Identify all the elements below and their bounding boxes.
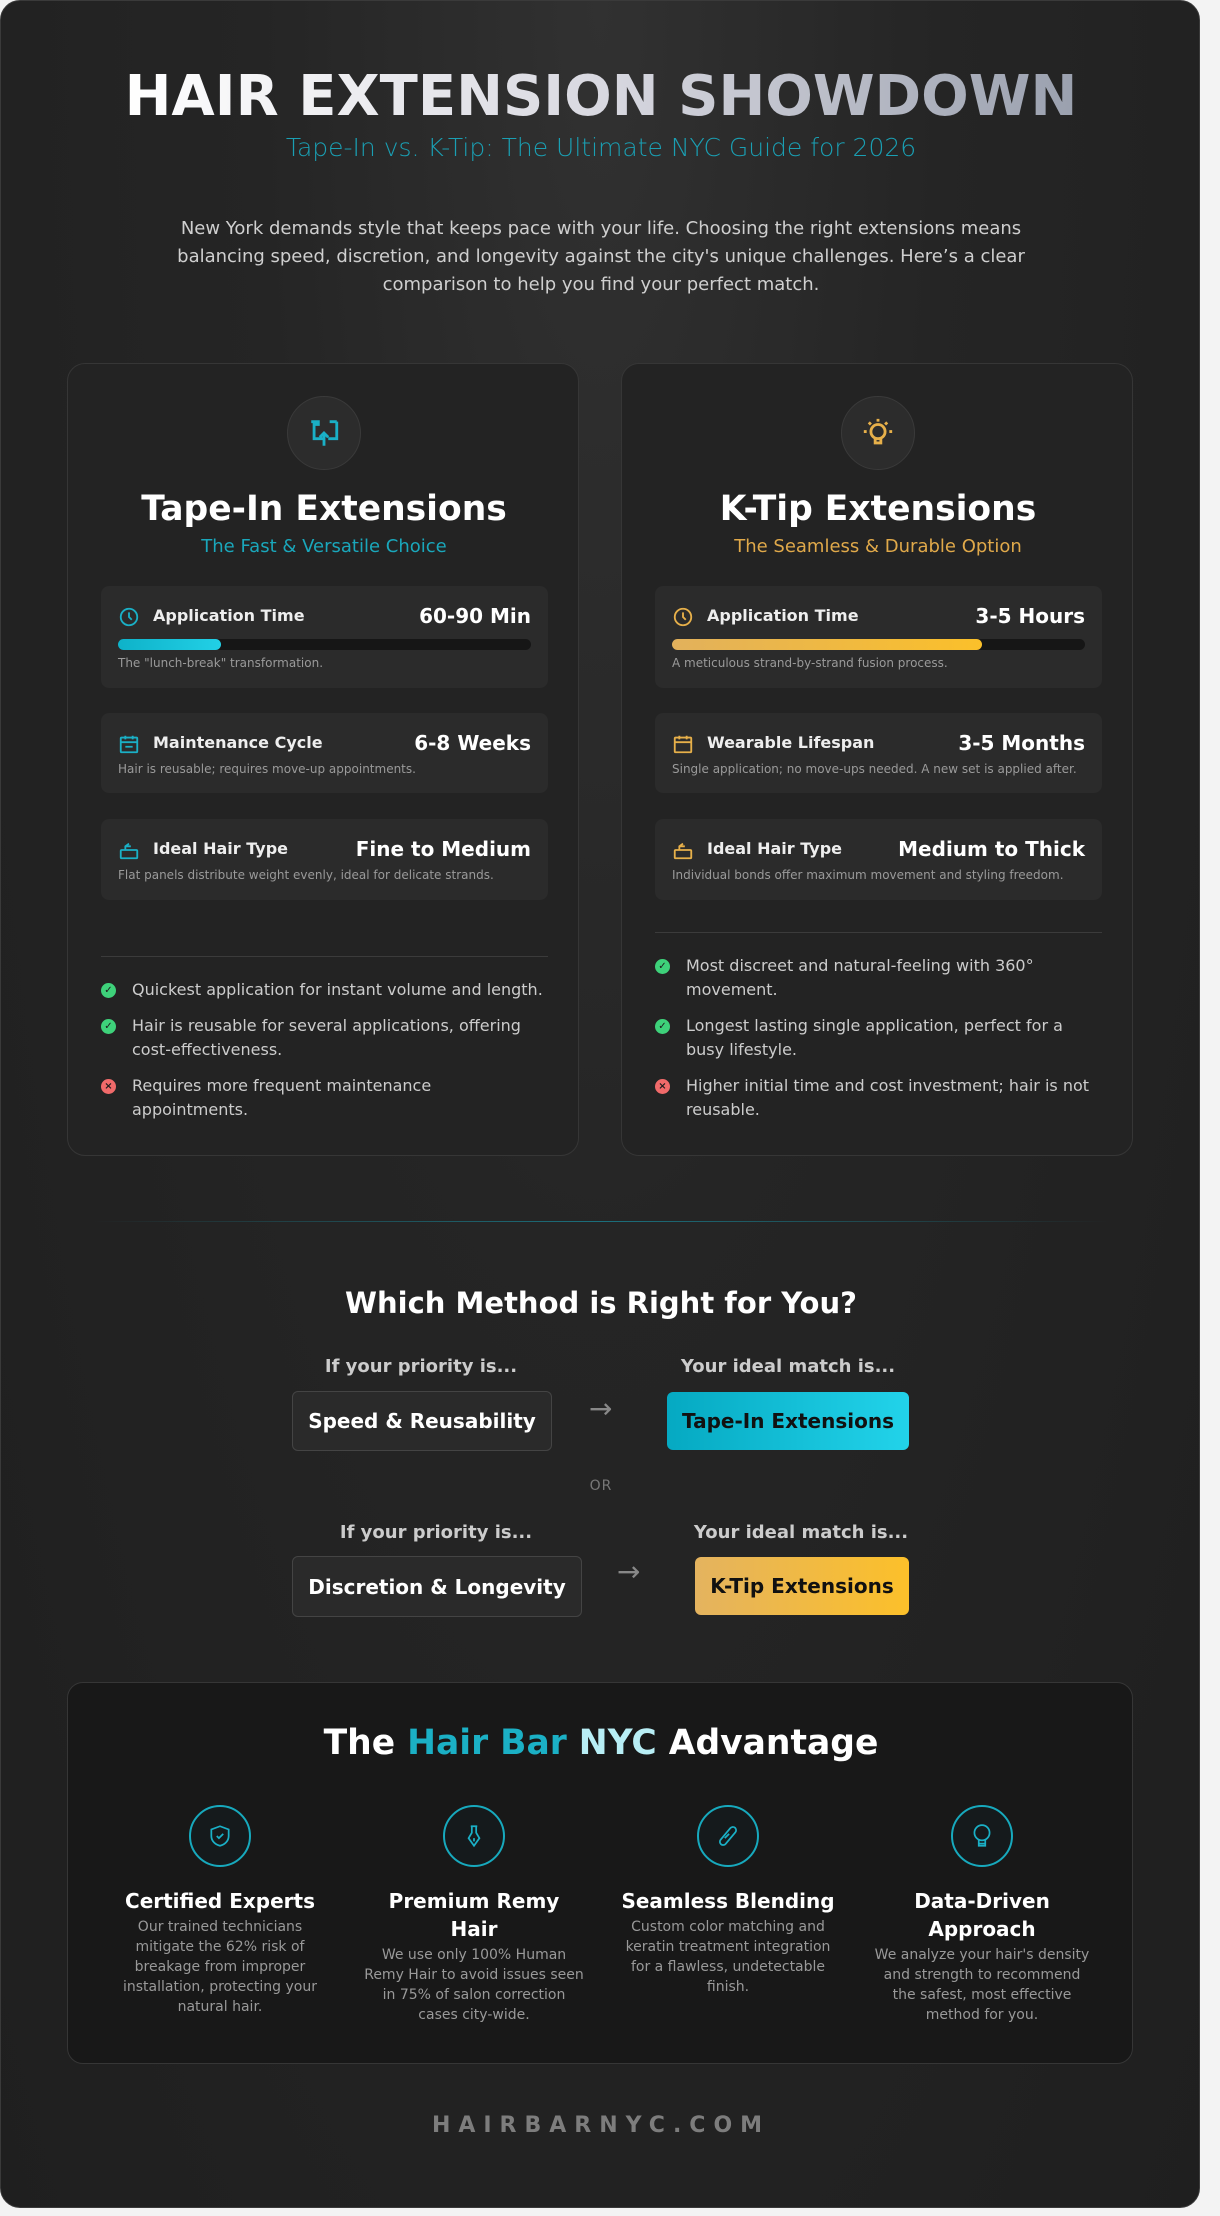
pros and cons: ✓ (658, 1021, 667, 1032)
stat: hair type: Fine to Medium (356, 837, 531, 861)
pros and cons: Requires more frequent maintenance appointments. (132, 1076, 431, 1119)
pros and cons: ✓ (658, 961, 667, 972)
panel: tape-in (67, 363, 579, 1156)
decision row 2: If your priority is... (340, 1522, 532, 1543)
subtitle: Tape-In vs. K-Tip: The Ultimate NYC Guide for 2026 (286, 133, 916, 162)
feature: premium remy hair: Premium Remy Hair (389, 1889, 559, 1941)
pros and cons: × (658, 1081, 667, 1092)
pros and cons (655, 956, 1089, 1119)
section heading: which method: Which Method is Right for You? (345, 1286, 857, 1320)
feature: premium remy hair (364, 1805, 584, 2023)
pros and cons: Hair is reusable for several applications, offering cost-effectiveness. (132, 1016, 521, 1059)
feature: seamless blending: Custom color matching and keratin treatment integration for a flawless, undetectable finish. (626, 1919, 830, 1995)
decision row 2: K-Tip Extensions (710, 1574, 894, 1598)
pros and cons: × (104, 1081, 113, 1092)
decision row 1 (292, 1356, 909, 1451)
feature: certified experts: Our trained technicians mitigate the 62% risk of breakage from improper installation, protecting your natural hair. (123, 1919, 317, 2015)
feature: certified experts (123, 1805, 317, 2015)
stat: application time: 3-5 Hours (975, 604, 1085, 628)
decision row 2: Discretion & Longevity (308, 1574, 566, 1598)
decision row 2: Your ideal match is... (694, 1522, 908, 1543)
pros and cons: Quickest application for instant volume and length. (132, 980, 543, 999)
card subtitle: The Fast & Versatile Choice (201, 536, 447, 557)
stat: hair type: Ideal Hair Type (707, 839, 842, 858)
decision row 1: Your ideal match is... (681, 1356, 895, 1377)
feature: seamless blending (621, 1805, 835, 1995)
feature: data-driven: We analyze your hair's density and strength to recommend the safest, most effective method for you. (875, 1947, 1089, 2023)
feature: data-driven (875, 1805, 1089, 2023)
card title: K-Tip Extensions (720, 489, 1036, 529)
arrow: → (617, 1555, 640, 1588)
decision row 1: If your priority is... (325, 1356, 517, 1377)
pros and cons: Longest lasting single application, perfect for a busy lifestyle. (686, 1016, 1063, 1059)
stat: lifespan: Single application; no move-ups needed. A new set is applied after. (672, 762, 1077, 776)
stat: hair type: Medium to Thick (898, 837, 1085, 861)
stat: hair type (655, 819, 1102, 900)
stat: application time: The "lunch-break" transformation. (118, 656, 323, 670)
stat: maintenance: 6-8 Weeks (414, 731, 531, 755)
stat: maintenance: Maintenance Cycle (153, 733, 323, 752)
stat: application time: Application Time (153, 606, 305, 625)
stat: hair type (101, 819, 548, 900)
stat: application time (101, 586, 548, 688)
decision row 1: Tape-In Extensions (682, 1409, 894, 1433)
decision row 1: Speed & Reusability (308, 1409, 536, 1433)
pros and cons (101, 980, 543, 1119)
decision row 2 (292, 1522, 909, 1617)
icon: lightbulb (841, 396, 915, 470)
feature: data-driven: Data-Driven Approach (914, 1889, 1050, 1941)
pros and cons: Higher initial time and cost investment; hair is not reusable. (686, 1076, 1089, 1119)
footer: HAIRBARNYC.COM (432, 2113, 770, 2138)
stat: hair type: Ideal Hair Type (153, 839, 288, 858)
stat: maintenance (101, 713, 548, 793)
stat: lifespan (655, 713, 1102, 793)
stat: lifespan: Wearable Lifespan (707, 733, 874, 752)
title: HAIR EXTENSION SHOWDOWN (125, 64, 1077, 129)
pros and cons: ✓ (104, 1021, 113, 1032)
stat: hair type: Flat panels distribute weight evenly, ideal for delicate strands. (118, 868, 494, 882)
stat: application time: Application Time (707, 606, 859, 625)
stat: lifespan: 3-5 Months (958, 731, 1085, 755)
panel: advantage (67, 1682, 1133, 2064)
stat: application time (655, 586, 1102, 688)
intro text: New York demands style that keeps pace with your life. Choosing the right extensions means balancing speed, discretion, and longevity against the city's unique challenges. Here’s a clear comparison to help you find your perfect match. (177, 218, 1025, 295)
stat: application time: 60-90 Min (419, 604, 531, 628)
icon: tape-in (287, 396, 361, 470)
card subtitle: The Seamless & Durable Option (734, 536, 1022, 557)
stat: application time: A meticulous strand-by-strand fusion process. (672, 656, 948, 670)
feature: premium remy hair: We use only 100% Human Remy Hair to avoid issues seen in 75% of salon correction cases city-wide. (364, 1947, 584, 2023)
stat: maintenance: Hair is reusable; requires move-up appointments. (118, 762, 416, 776)
pros and cons: ✓ (104, 985, 113, 996)
advantage title: The Hair Bar NYC Advantage (324, 1723, 878, 1763)
or: OR (590, 1478, 612, 1494)
stat: hair type: Individual bonds offer maximum movement and styling freedom. (672, 868, 1064, 882)
arrow: → (589, 1392, 612, 1425)
card title: Tape-In Extensions (141, 489, 507, 529)
feature: certified experts: Certified Experts (125, 1889, 315, 1913)
panel: k-tip (621, 363, 1133, 1156)
feature: seamless blending: Seamless Blending (621, 1889, 835, 1913)
pros and cons: Most discreet and natural-feeling with 360° movement. (686, 956, 1034, 999)
